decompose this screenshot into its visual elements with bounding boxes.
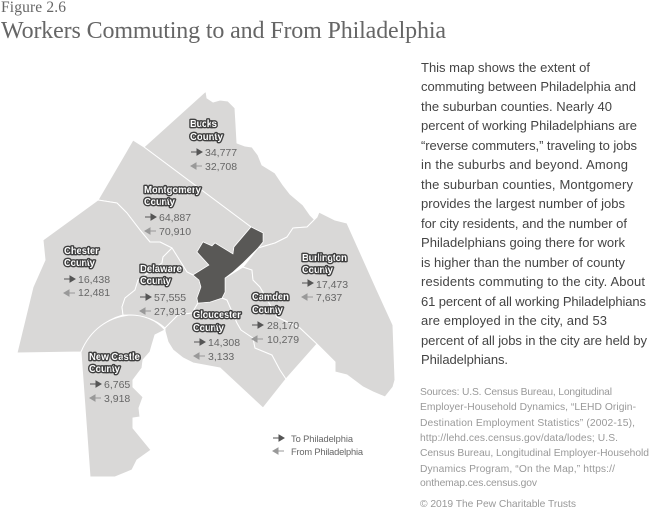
Delaware County data — [140, 264, 186, 318]
body text: percent of working Philadelphians are — [421, 118, 637, 133]
Delaware County data: Delaware — [140, 264, 183, 275]
legend — [273, 434, 364, 457]
Bucks County data: 32,708 — [205, 161, 237, 173]
Burlington County data: County — [302, 265, 334, 276]
body text: “reverse commuters,” traveling to jobs — [421, 138, 638, 153]
Bucks County data: Bucks — [190, 119, 218, 130]
Burlington County data — [302, 253, 348, 304]
county: Gloucester — [165, 298, 286, 408]
New Castle County data: 6,765 — [104, 379, 130, 391]
body text: are employed in the city, and 53 — [421, 313, 607, 328]
Delaware County data: County — [140, 276, 172, 287]
Philadelphia — [193, 227, 263, 303]
body text: provides the largest number of jobs — [421, 196, 626, 211]
body text: Philadelphians going there for work — [421, 235, 626, 250]
county: Bucks — [144, 91, 319, 248]
New Castle County data — [89, 352, 141, 405]
Camden County data: 28,170 — [267, 320, 299, 332]
Camden County data — [252, 292, 299, 346]
sources: Census Bureau, Longitudinal Employer-Household — [420, 448, 649, 459]
Montgomery County data — [144, 185, 202, 238]
body text: for city residents, and the number of — [421, 216, 627, 231]
Delaware County data: 57,555 — [154, 292, 186, 304]
body text: is higher than the number of county — [421, 255, 626, 270]
body text: 61 percent of all working Philadelphians — [421, 294, 646, 309]
Chester County data: 16,438 — [78, 274, 110, 286]
body text: This map shows the extent of — [421, 60, 590, 75]
Chester County data: County — [64, 258, 96, 269]
sources: Destination Employment Statistics” (2002-15), — [420, 418, 635, 429]
body text — [421, 60, 648, 367]
body text: commuting between Philadelphia and — [421, 79, 636, 94]
Bucks County data: 34,777 — [205, 147, 237, 159]
map of counties — [17, 91, 395, 477]
Burlington County data: 17,473 — [316, 279, 348, 291]
Burlington County data: Burlington — [302, 253, 347, 264]
New Castle County data: County — [89, 364, 121, 375]
Camden County data: Camden — [252, 292, 289, 303]
body text: the suburban counties. Nearly 40 — [421, 99, 612, 114]
legend: To Philadelphia — [291, 434, 354, 444]
county: New Castle — [81, 315, 165, 477]
New Castle County data: New Castle — [89, 352, 141, 363]
sources: Dynamics Program, “On the Map,” https:// — [420, 464, 615, 475]
county: Chester — [17, 200, 172, 353]
body text: the suburban counties, Montgomery — [421, 177, 634, 192]
Bucks County data: County — [190, 132, 224, 143]
sources: Employer-Household Dynamics, “LEHD Origin- — [420, 402, 636, 413]
Gloucester County data: 14,308 — [208, 337, 240, 349]
Chester County data: 12,481 — [78, 287, 110, 299]
body text: in the suburbs and beyond. Among — [421, 157, 628, 172]
county: Montgomery — [98, 140, 251, 275]
body text: percent of all jobs in the city are held by — [421, 333, 648, 348]
Delaware County data: 27,913 — [154, 306, 186, 318]
Gloucester County data: 3,133 — [208, 351, 234, 363]
body text: residents commuting to the city. About — [421, 274, 645, 289]
Montgomery County data: Montgomery — [144, 185, 202, 196]
Gloucester County data: Gloucester — [193, 310, 241, 321]
Burlington County data: 7,637 — [316, 292, 342, 304]
Chester County data — [64, 246, 110, 299]
title: Workers Commuting to and From Philadelphia — [1, 18, 446, 44]
county: Camden — [222, 267, 317, 379]
county: Burlington — [243, 212, 395, 397]
Montgomery County data: 70,910 — [159, 226, 191, 238]
Camden County data: County — [252, 305, 284, 316]
sources: onthemap.ces.census.gov — [420, 478, 538, 489]
New Castle County data: 3,918 — [104, 393, 130, 405]
Montgomery County data: County — [144, 197, 176, 208]
body text: Philadelphians. — [421, 352, 508, 367]
sources — [420, 387, 649, 489]
Camden County data: 10,279 — [267, 334, 299, 346]
Gloucester County data — [193, 310, 241, 363]
Bucks County data — [190, 119, 237, 173]
Montgomery County data: 64,887 — [159, 212, 191, 224]
sources: http://lehd.ces.census.gov/data/lodes; U.S. — [420, 433, 618, 444]
county: Delaware — [122, 248, 201, 328]
Gloucester County data: County — [193, 323, 225, 334]
legend: From Philadelphia — [291, 447, 364, 457]
Chester County data: Chester — [64, 246, 99, 257]
sources: Sources: U.S. Census Bureau, Longitudinal — [420, 387, 612, 398]
